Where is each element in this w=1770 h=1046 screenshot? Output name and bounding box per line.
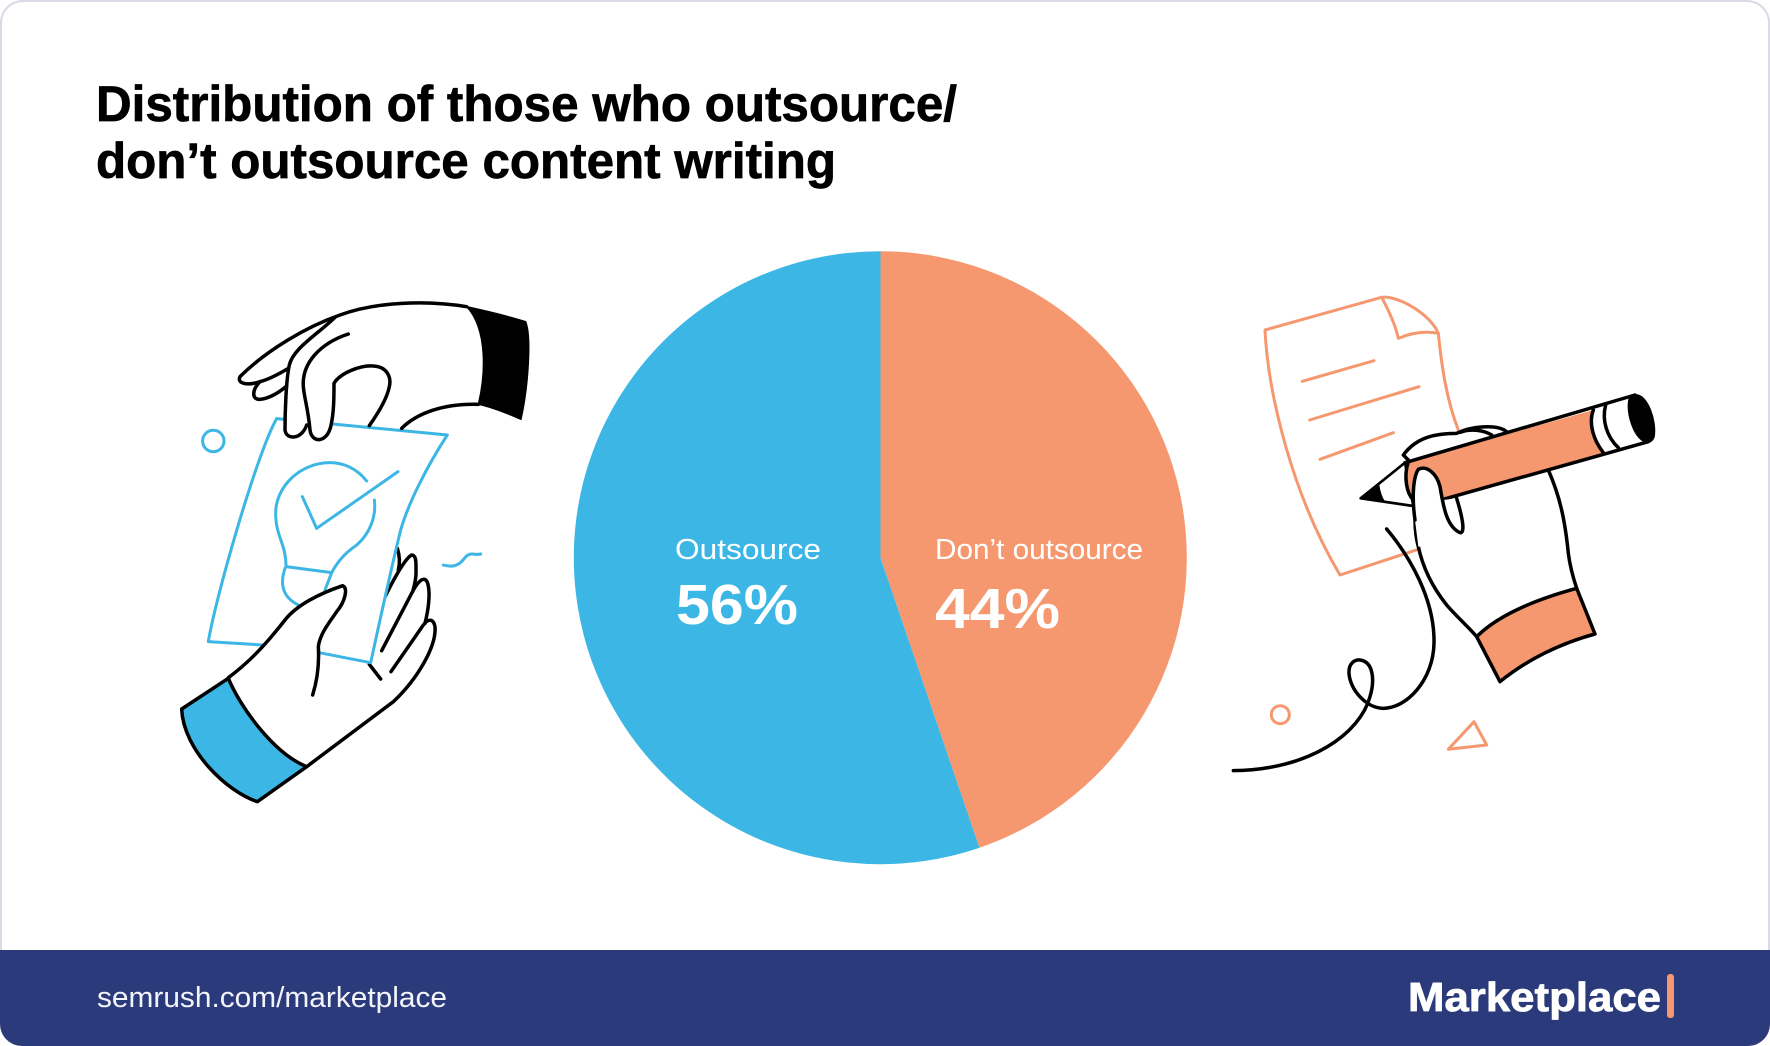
- pencil eraser end: [1629, 395, 1654, 442]
- orange cuff: [1477, 588, 1595, 682]
- label: don't outsource: [935, 534, 1143, 641]
- label: outsource: Outsource: [675, 534, 821, 566]
- pencil body: [1406, 410, 1603, 500]
- label: outsource: [675, 534, 821, 637]
- lower hand thumb and blue cuff: [182, 586, 345, 802]
- decorative orange triangle: [1448, 722, 1487, 749]
- upper hand: [239, 303, 529, 440]
- pencil: [1361, 395, 1654, 547]
- decorative blue squiggle: [443, 554, 481, 566]
- index finger: [1413, 468, 1463, 547]
- footer bar: [0, 950, 1770, 1046]
- label: don't outsource: 44%: [935, 577, 1060, 641]
- check mark: [302, 472, 398, 528]
- decorative orange circle: [1271, 706, 1289, 724]
- lower hand back fingers: [228, 548, 435, 767]
- idea document: [208, 419, 447, 663]
- title: don’t outsource content writing: [96, 133, 836, 189]
- lightbulb: [276, 463, 375, 573]
- black cuff: [467, 307, 529, 419]
- pie slice: outsource 56%: [574, 251, 980, 864]
- pie slice: don't outsource 44%: [880, 251, 1187, 848]
- blue cuff: [182, 678, 307, 802]
- illustration: hand writing with pencil: [1233, 297, 1654, 771]
- label: outsource: 56%: [676, 573, 798, 637]
- flourish line: [1233, 529, 1595, 771]
- footer url: semrush.com/marketplace: [97, 982, 447, 1014]
- label: don't outsource: Don’t outsource: [935, 534, 1143, 566]
- pencil tip: [1361, 463, 1413, 506]
- writing hand: [1403, 427, 1577, 637]
- marketplace logo: Marketplace: [1408, 974, 1661, 1020]
- pie chart: [574, 251, 1187, 864]
- document with lines: [1265, 297, 1483, 575]
- title: [96, 76, 957, 189]
- title: Distribution of those who outsource/: [96, 76, 957, 132]
- decorative blue circle: [203, 430, 224, 452]
- illustration: hands passing an idea document: [182, 303, 529, 802]
